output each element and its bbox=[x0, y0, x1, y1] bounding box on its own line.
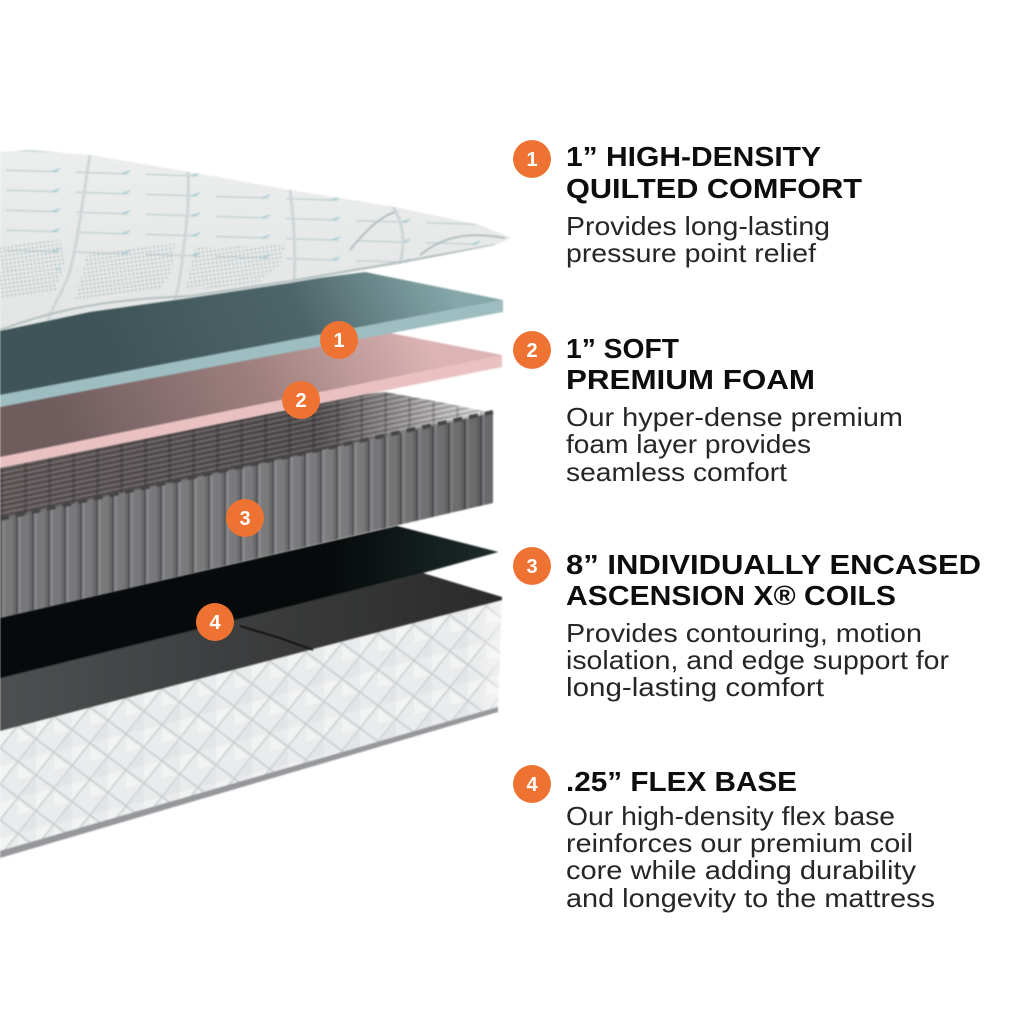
quilted comfort top layer bbox=[0, 150, 512, 331]
badge 2: 2 bbox=[526, 340, 538, 362]
marker 2 on diagram bbox=[282, 381, 320, 419]
heading 3: 8” INDIVIDUALLY ENCASED bbox=[566, 549, 981, 580]
heading 1: QUILTED COMFORT bbox=[566, 173, 862, 204]
section 3: coils bbox=[513, 547, 981, 702]
heading 2: PREMIUM FOAM bbox=[566, 364, 815, 395]
badge 3: 3 bbox=[526, 556, 538, 578]
marker 4 on diagram: 4 bbox=[209, 612, 221, 634]
description 4 bbox=[566, 801, 935, 913]
base: dark top surface bbox=[0, 573, 502, 731]
layer 1: teal foam bbox=[0, 272, 503, 407]
description 2: seamless comfort bbox=[566, 457, 788, 487]
description 3: Provides contouring, motion bbox=[566, 618, 922, 648]
badge 2 bbox=[513, 331, 551, 369]
description 3: long-lasting comfort bbox=[566, 672, 825, 702]
layer 2: pink foam bbox=[0, 332, 502, 468]
marker 3 on diagram: 3 bbox=[239, 508, 251, 530]
marker 1 on diagram: 1 bbox=[333, 330, 345, 352]
layer 4: black flex base sheet bbox=[0, 526, 498, 678]
description 4: reinforces our premium coil bbox=[566, 828, 913, 858]
description 2: foam layer provides bbox=[566, 429, 811, 459]
layer 3: pocket coils bbox=[0, 392, 493, 618]
heading 3 bbox=[566, 549, 981, 611]
badge 1: 1 bbox=[526, 149, 538, 171]
section 1: quilted comfort bbox=[513, 140, 862, 268]
heading 1 bbox=[566, 141, 862, 204]
marker 1 on diagram bbox=[320, 321, 358, 359]
heading 2: 1” SOFT bbox=[566, 333, 679, 364]
illustration: exploded mattress layers bbox=[0, 150, 512, 858]
description 2 bbox=[566, 402, 903, 487]
marker 2 on diagram: 2 bbox=[295, 390, 307, 412]
description 4: core while adding durability bbox=[566, 855, 916, 885]
badge 3 bbox=[513, 547, 551, 585]
description 2: Our hyper-dense premium bbox=[566, 402, 903, 432]
badge 1 bbox=[513, 140, 551, 178]
description 3 bbox=[566, 618, 949, 702]
marker 4 on diagram bbox=[196, 603, 234, 641]
heading 3: ASCENSION X® COILS bbox=[566, 580, 896, 611]
badge 4 bbox=[513, 765, 551, 803]
description 1: Provides long-lasting bbox=[566, 211, 830, 241]
description 3: isolation, and edge support for bbox=[566, 645, 949, 675]
description 4: Our high-density flex base bbox=[566, 801, 895, 831]
section 2: premium foam bbox=[513, 331, 903, 487]
description 1 bbox=[566, 211, 830, 268]
description 4: and longevity to the mattress bbox=[566, 883, 935, 913]
badge 4: 4 bbox=[526, 774, 538, 796]
marker 3 on diagram bbox=[226, 499, 264, 537]
heading 2 bbox=[566, 333, 815, 395]
base: quilted side panel bbox=[0, 600, 502, 858]
heading 4: .25” FLEX BASE bbox=[566, 766, 797, 797]
section 4: flex base bbox=[513, 765, 935, 913]
description 1: pressure point relief bbox=[566, 238, 817, 268]
heading 1: 1” HIGH-DENSITY bbox=[566, 141, 821, 172]
